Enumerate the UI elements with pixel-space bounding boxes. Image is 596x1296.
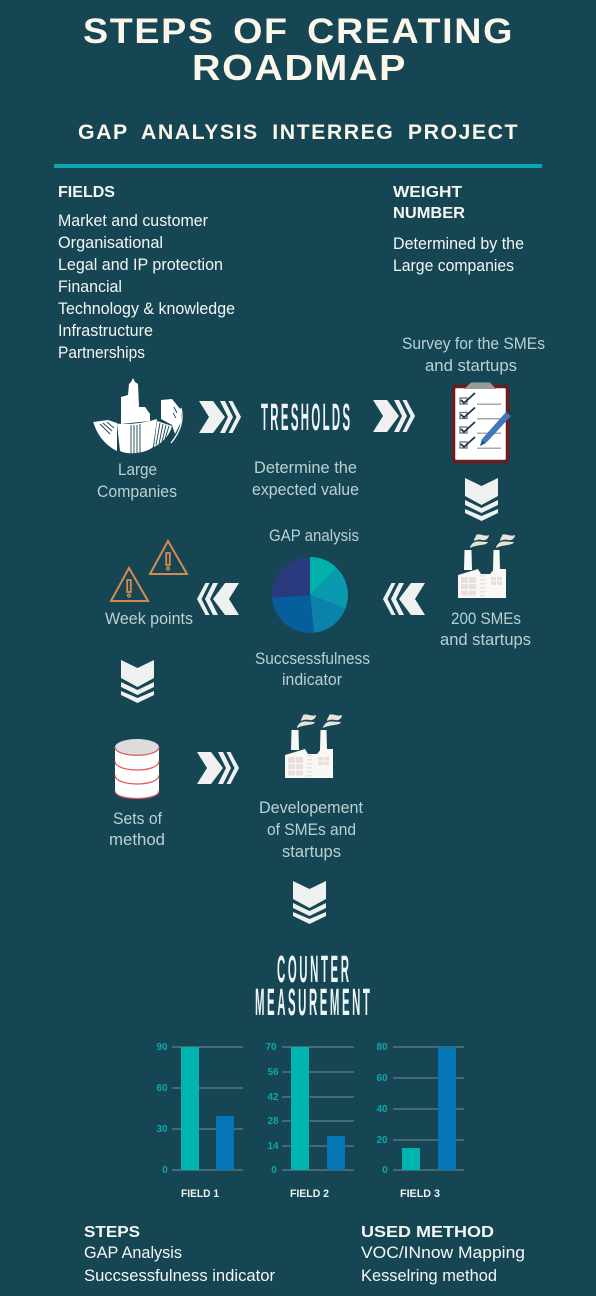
text: expected value: [252, 459, 359, 499]
arrow: companies to thresholds: [199, 401, 241, 433]
heading: weight number: WEIGHT: [393, 184, 462, 201]
heading: thresholds: TRESHOLDS: [261, 396, 350, 438]
text: 200 SMEs: and startups: [440, 631, 531, 649]
arrow: SMEs to GAP analysis: [383, 583, 425, 615]
text: development: [259, 799, 363, 861]
text: large companies: Large: [118, 461, 157, 479]
arrow: development to counter measurement: [293, 881, 326, 924]
text: development: Developement: [259, 799, 363, 817]
chart: field 1: 0: [162, 1165, 168, 1176]
chart: field 2: 42: [267, 1092, 279, 1103]
text: 200 SMEs: [440, 610, 531, 649]
chart: field 2: [265, 1042, 354, 1200]
chart: field 2: 28: [267, 1116, 279, 1127]
arrow: GAP analysis to week points: [197, 583, 239, 615]
heading: counter measurement: MEASUREMENT: [255, 981, 370, 1023]
list: steps: Succsessfulness indicator: [84, 1267, 276, 1285]
heading: used method: USED METHOD: [361, 1224, 494, 1241]
text: 200 SMEs: 200 SMEs: [451, 610, 521, 628]
panel: used method: [361, 1224, 525, 1285]
text: development: of SMEs and: [267, 821, 356, 839]
subtitle: GAP ANALYSIS INTERREG PROJECT: [78, 121, 519, 144]
text: survey: and startups: [425, 357, 517, 375]
list: fields: Technology & knowledge: [58, 300, 235, 318]
chart: field 2: FIELD 2: [290, 1188, 329, 1200]
chart: field 3: 80: [376, 1042, 388, 1053]
chart: field 3: FIELD 3: [400, 1188, 440, 1200]
list: fields: [58, 212, 235, 362]
chart: field 2: 70: [265, 1042, 277, 1053]
chart: field 1: 90: [156, 1042, 168, 1053]
chart: field 1: [156, 1042, 243, 1200]
list: used method: VOC/INnow Mapping: [361, 1244, 525, 1262]
heading: steps: STEPS: [84, 1224, 140, 1241]
text: successfulness indicator: indicator: [282, 671, 342, 689]
chart: field 2: 14: [267, 1141, 279, 1152]
heading: counter measurement: [255, 948, 370, 1023]
text: weight description: Large companies: [393, 257, 514, 275]
panel: weight number: [393, 184, 524, 275]
text: weight description: Determined by the: [393, 235, 524, 253]
list: fields: Financial: [58, 278, 122, 296]
text: sets of method: Sets of: [113, 810, 162, 828]
icon: warning triangles: [111, 541, 187, 601]
chart: field 3: 60: [376, 1073, 388, 1084]
text: survey: [402, 335, 545, 375]
text: week points: Week points: [105, 610, 193, 628]
text: survey: Survey for the SMEs: [402, 335, 545, 353]
list: steps: GAP Analysis: [84, 1244, 182, 1262]
list: steps: [84, 1244, 276, 1285]
text: development: startups: [282, 843, 341, 861]
title: STEPS OF CREATING: [83, 12, 514, 51]
text: large companies: Companies: [97, 483, 177, 501]
title: [83, 12, 514, 88]
list: fields: Partnerships: [58, 344, 145, 362]
panel: steps: [84, 1224, 276, 1285]
list: used method: [361, 1244, 525, 1285]
heading: weight number: [393, 184, 465, 222]
icon: large companies skyline: [93, 378, 182, 455]
arrow: thresholds to survey: [373, 400, 415, 432]
list: used method: Kesselring method: [361, 1267, 497, 1285]
list: fields: Legal and IP protection: [58, 256, 223, 274]
arrow: survey to SMEs: [465, 478, 498, 521]
icon: factory 200 SMEs: [458, 534, 515, 598]
text: successfulness indicator: Succsessfulness: [255, 650, 370, 668]
list: fields: Organisational: [58, 234, 163, 252]
text: sets of method: [109, 810, 165, 849]
text: expected value: expected value: [252, 481, 359, 499]
chart: field 2: 0: [271, 1165, 277, 1176]
icon: factory development: [285, 714, 342, 778]
chart: field 2: 56: [267, 1067, 279, 1078]
chart: field 1: FIELD 1: [181, 1188, 219, 1200]
list: fields: Market and customer: [58, 212, 208, 230]
heading: counter measurement: COUNTER: [277, 948, 349, 990]
chart: field 3: 40: [376, 1104, 388, 1115]
text: expected value: Determine the: [254, 459, 357, 477]
text: large companies: [97, 461, 177, 501]
text: GAP analysis: GAP analysis: [269, 527, 359, 545]
chart: field 1: 60: [156, 1083, 168, 1094]
arrow: week points to sets of method: [121, 660, 154, 703]
heading: fields: FIELDS: [58, 184, 115, 201]
pie chart: [272, 557, 348, 633]
panel: fields: [58, 184, 235, 362]
chart: field 3: 0: [382, 1165, 388, 1176]
icon: database: [115, 739, 159, 798]
icon: survey clipboard: [454, 382, 511, 462]
arrow: method to development: [197, 752, 239, 784]
text: sets of method: method: [109, 831, 165, 849]
text: weight description: [393, 235, 524, 275]
list: fields: Infrastructure: [58, 322, 153, 340]
chart: field 3: 20: [376, 1135, 388, 1146]
chart: field 1: 30: [156, 1124, 168, 1135]
heading: weight number: NUMBER: [393, 205, 465, 222]
chart: field 3: [376, 1042, 464, 1200]
title: ROADMAP: [192, 47, 407, 88]
text: successfulness indicator: [255, 650, 370, 689]
